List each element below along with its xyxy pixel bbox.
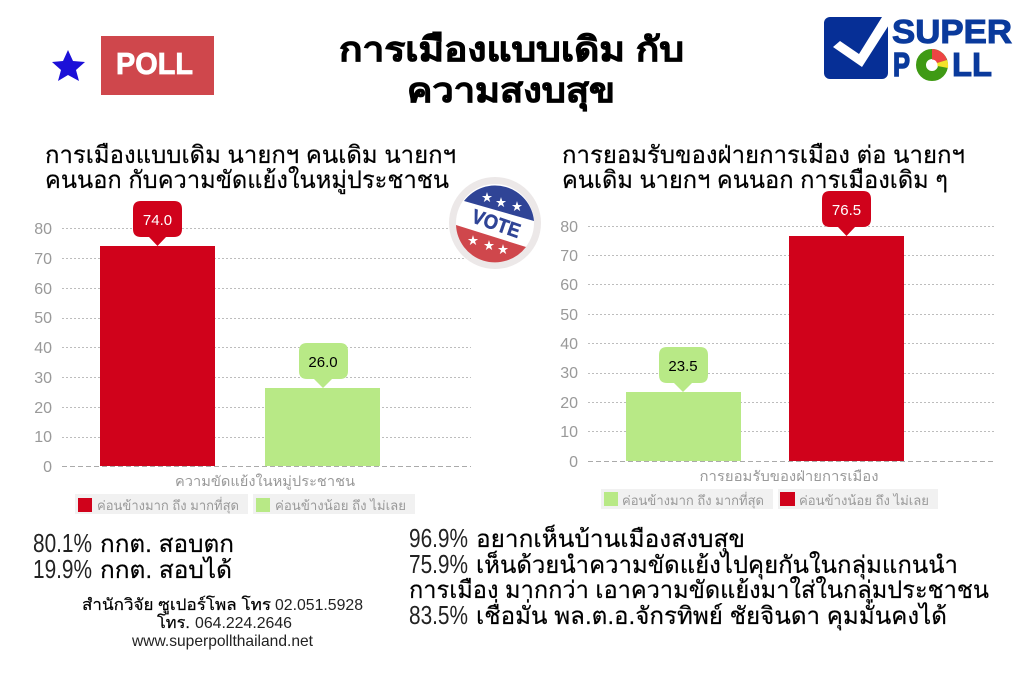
heading: right chart: คนเดิม นายกฯ คนนอก การเมืองเดิม ๆ [562,167,948,194]
legend [75,494,415,514]
bar chart: left: 30 [34,370,52,387]
bar: 23.5 [626,392,741,461]
text block: right findings: 83.5% [409,600,468,630]
bar chart: right: 70 [560,248,578,265]
icon: vote badge: ★ [484,240,494,252]
bar: 26.0 [265,388,380,466]
text block: contact: www.superpollthailand.net [131,633,314,650]
bar chart: left: 80 [34,221,52,238]
text block: right findings: เชื่อมั่น พล.ต.อ.จักรทิพย์ ชัยจินดา คุมมั่นคงได้ [476,599,947,631]
callout: 23.5: 23.5 [668,358,698,375]
bar chart: left: 10 [34,429,52,446]
text block: left findings [33,528,234,584]
logo: Super Poll: P [893,46,910,83]
icon: vote badge: ★ [482,192,492,204]
bar chart: right: 80 [560,219,578,236]
icon: vote badge [449,177,541,269]
badge: POLL: POLL [116,46,193,81]
callout: 26.0: 26.0 [308,354,338,371]
text block: right findings [409,523,989,631]
bar chart: left: 20 [34,400,52,417]
badge: POLL [101,36,214,95]
text block: right findings: อยากเห็นบ้านเมืองสงบสุข [476,524,745,554]
text block: contact: 064.224.2646 [195,615,292,632]
bar chart: left: 0 [43,459,52,476]
icon: vote badge: ★ [468,235,478,247]
text block: left findings: กกต. สอบได้ [100,556,232,584]
bar chart: left [34,201,471,514]
text block: contact: สำนักวิจัย ซูเปอร์โพล โทร [82,595,271,615]
heading: left chart [45,142,456,195]
axis label: ความขัดแย้งในหมู่ประชาชน [175,473,355,490]
bar chart: left: 70 [34,251,52,268]
text block: left findings: กกต. สอบตก [100,531,234,558]
bar: 76.5 [789,236,904,461]
legend: ค่อนข้างน้อย ถึง ไม่เลย [799,493,929,508]
title [339,31,684,112]
bar chart: right: 40 [560,336,578,353]
text block: right findings: 75.9% [409,549,468,579]
icon: blue star [52,50,85,81]
text block: right findings: 96.9% [409,523,468,553]
heading: left chart: คนนอก กับความขัดแย้งในหมู่ประชาชน [45,166,449,195]
heading: right chart [562,142,965,194]
callout: 76.5: 76.5 [832,202,861,219]
bar chart: right: 50 [560,307,578,324]
bar chart: left: 60 [34,281,52,298]
callout: 74.0: 74.0 [143,212,172,229]
bar chart: right: 20 [560,395,578,412]
icon: vote badge: ★ [498,244,508,256]
bar chart: right: 60 [560,277,578,294]
icon: vote badge: ★ [496,197,506,209]
title: การเมืองแบบเดิม กับ [339,31,684,69]
bar chart: right [560,191,994,509]
bar chart: right: 30 [560,365,578,382]
text block: right findings: การเมือง มากกว่า เอาความขัดแย้งมาใส่ในกลุ่มประชาชน [409,576,989,605]
logo: Super Poll: SUPER [892,13,1012,50]
logo: Super Poll: LL [952,46,992,83]
logo: Super Poll [824,13,1012,83]
legend: ค่อนข้างมาก ถึง มากที่สุด [622,492,764,509]
icon: vote badge: VOTE [469,206,523,243]
text block: contact [82,595,363,650]
legend: ค่อนข้างน้อย ถึง ไม่เลย [275,498,406,513]
callout: 74.0 [133,201,182,246]
legend [601,489,938,509]
heading: left chart: การเมืองแบบเดิม นายกฯ คนเดิม นายกฯ [45,142,456,169]
legend: ค่อนข้างมาก ถึง มากที่สุด [97,497,239,514]
text block: left findings: 80.1% [33,528,92,558]
heading: right chart: การยอมรับของฝ่ายการเมือง ต่อ นายกฯ [562,142,965,169]
callout: 23.5 [659,347,708,392]
text block: right findings: เห็นด้วยนำความขัดแย้งไปคุยกันในกลุ่มแกนนำ [476,550,958,580]
bar chart: right: 10 [560,424,578,441]
bar chart: left: 40 [34,340,52,357]
bar chart: left: 50 [34,310,52,327]
axis label: การยอมรับของฝ่ายการเมือง [700,468,878,484]
title: ความสงบสุข [407,72,615,112]
bar chart: right: 0 [569,454,578,471]
callout: 76.5 [822,191,871,236]
text block: left findings: 19.9% [33,554,92,584]
bar: 74.0 [100,246,215,466]
icon: vote badge: ★ [512,201,522,213]
callout: 26.0 [299,343,348,388]
text block: contact: 02.051.5928 [275,597,363,614]
text block: contact: โทร. [157,613,190,632]
